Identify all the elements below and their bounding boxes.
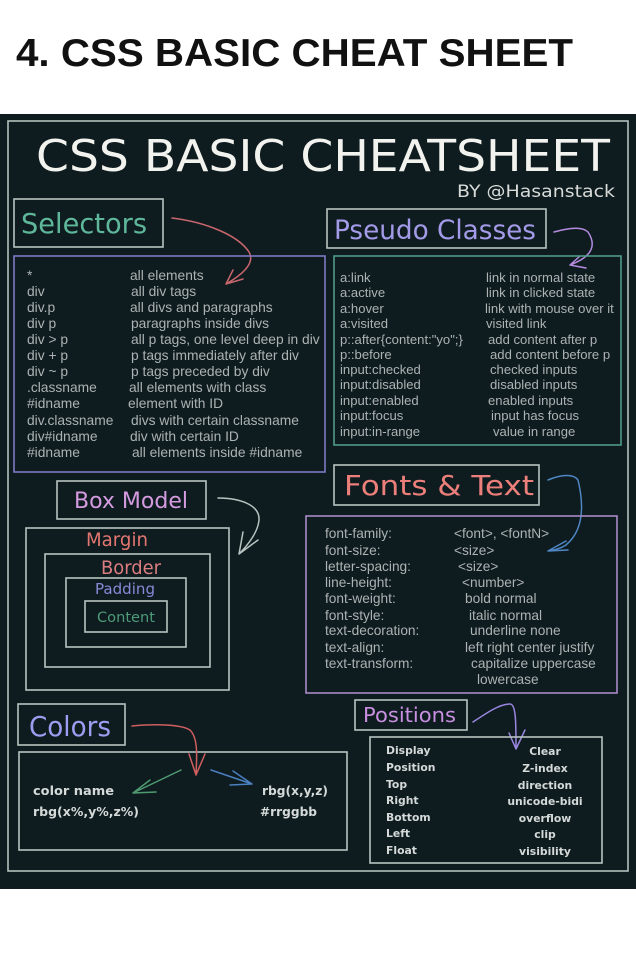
selector names: div.classname [27,413,114,428]
pseudo class names: a:visited [340,316,388,331]
colors heading [18,704,125,745]
colors heading: Colors [29,710,111,743]
selector descriptions: p tags preceded by div [131,364,270,379]
pseudo class names [340,270,463,439]
panel: positions [370,737,602,863]
author credit: BY @Hasanstack [457,182,615,202]
font property values: underline none [470,623,561,638]
pseudo class names: p::before [340,347,392,362]
panel: colors [19,752,347,850]
positions heading [355,700,467,730]
arrow: fonts and text [548,476,582,551]
selector descriptions: all div tags [131,284,196,299]
font property names [325,526,419,671]
font property values: capitalize uppercase [471,656,596,671]
pseudo class descriptions: disabled inputs [490,377,578,392]
selector descriptions: div with certain ID [130,429,239,444]
pseudo class descriptions: link in clicked state [486,285,595,300]
pseudo class descriptions: add content before p [490,347,610,362]
selector descriptions: all elements inside #idname [132,445,303,460]
font property values: <size> [458,559,498,574]
font property names: font-weight: [325,591,396,606]
position properties right: visibility [519,845,571,858]
position properties left: Left [386,827,410,840]
pseudo class descriptions [485,270,614,439]
pseudo class names: input:in-range [340,424,420,439]
pseudo class names: input:checked [340,362,421,377]
selector descriptions [128,268,320,460]
selector descriptions: all elements with class [129,380,266,395]
box model diagram [26,528,229,690]
pseudo class names: a:hover [340,301,384,316]
selector names: div [27,284,45,299]
page title: 4. CSS BASIC CHEAT SHEET [16,32,573,75]
font property names: letter-spacing: [325,559,411,574]
selector names: div.p [27,300,55,315]
font property names: text-decoration: [325,623,419,638]
panel: selectors [14,256,325,472]
pseudo class descriptions: link with mouse over it [485,301,614,316]
arrow: selectors [172,218,251,284]
position properties left: Top [386,778,407,791]
font property names: text-align: [325,640,384,655]
pseudo class names: p::after{content:"yo";} [340,332,463,347]
arrow: colors left [133,770,181,793]
position properties right: clip [534,828,556,841]
pseudo classes heading: Pseudo Classes [334,215,536,246]
pseudo class names: input:focus [340,408,404,423]
selector names: #idname [27,396,80,411]
position properties left: Float [386,844,417,857]
colors right column: rbg(x,y,z) [262,783,328,798]
arrow: box model [218,498,259,554]
pseudo class names: a:link [340,270,371,285]
position properties right: Clear [529,745,561,758]
selectors heading: Selectors [21,207,147,240]
sheet heading: CSS BASIC CHEATSHEET [36,131,610,182]
selector descriptions: element with ID [128,396,223,411]
selector names: div p [27,316,56,331]
position properties left: Bottom [386,811,431,824]
position properties right [507,745,583,858]
selector names: .classname [27,380,97,395]
pseudo class names: input:disabled [340,377,421,392]
selector descriptions: all p tags, one level deep in div [131,332,320,347]
font property names: font-style: [325,608,384,623]
font property values: <number> [462,575,524,590]
pseudo class descriptions: enabled inputs [488,393,574,408]
colors right column: #rrggbb [260,804,317,819]
arrow: positions [473,704,525,749]
pseudo class descriptions: value in range [493,424,575,439]
colors left column: color name [33,783,114,798]
position properties left: Display [386,744,431,757]
arrow: pseudo classes [554,228,592,268]
selector descriptions: all divs and paragraphs [130,300,273,315]
colors right column [260,783,328,819]
box model heading [57,481,206,519]
fonts and text heading [334,465,539,505]
pseudo class descriptions: checked inputs [490,362,578,377]
selector names: #idname [27,445,80,460]
font property values: <size> [454,543,494,558]
selector names: div + p [27,348,68,363]
content label: Content [97,610,156,626]
colors left column: rbg(x%,y%,z%) [33,804,139,819]
selector descriptions: all elements [130,268,204,283]
selector descriptions: p tags immediately after div [131,348,299,363]
padding label: Padding [95,580,155,598]
selector names [27,268,114,460]
position properties right: unicode-bidi [507,795,583,808]
pseudo class descriptions: link in normal state [486,270,595,285]
arrow: colors right [211,770,252,785]
positions heading: Positions [363,703,456,727]
font property names: font-size: [325,543,381,558]
selectors heading [14,199,163,247]
position properties right: overflow [519,812,571,825]
selector descriptions: paragraphs inside divs [131,316,269,331]
font property values: bold normal [465,591,537,606]
pseudo class names: a:active [340,285,385,300]
position properties left [386,744,435,857]
pseudo class names: input:enabled [340,393,419,408]
border label: Border [101,557,161,579]
panel: pseudo classes [334,256,621,445]
pseudo class descriptions: add content after p [488,332,597,347]
selector names: div > p [27,332,68,347]
selector descriptions: divs with certain classname [131,413,299,428]
arrow: colors down [132,725,205,775]
font property values: <font>, <fontN> [454,526,549,541]
font property values: left right center justify [465,640,594,655]
colors left column [33,783,139,819]
pseudo class descriptions: visited link [486,316,547,331]
font property names: text-transform: [325,656,413,671]
panel: fonts and text [306,516,617,693]
font property values: lowercase [477,672,539,687]
position properties right: direction [518,779,572,792]
font property names: line-height: [325,575,392,590]
selector names: div ~ p [27,364,68,379]
font property values: italic normal [469,608,542,623]
pseudo class descriptions: input has focus [491,408,580,423]
font property names: font-family: [325,526,392,541]
position properties left: Right [386,794,419,807]
selector names: div#idname [27,429,98,444]
margin label: Margin [86,529,148,551]
selector names: * [27,268,33,283]
fonts and text heading: Fonts & Text [344,469,534,502]
font property values [454,526,596,687]
position properties left: Position [386,761,435,774]
position properties right: Z-index [522,762,568,775]
box model heading: Box Model [74,489,188,514]
